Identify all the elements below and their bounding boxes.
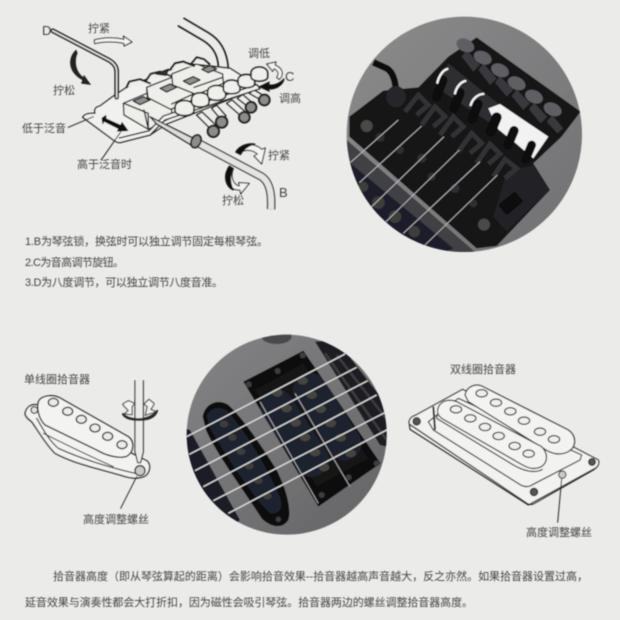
comb chrome part — [488, 104, 548, 158]
label: C: C — [285, 69, 294, 84]
saddles — [405, 95, 517, 178]
pickup body — [38, 396, 133, 457]
icon: double-headed arrow on plate — [102, 115, 128, 131]
height screw — [559, 471, 566, 478]
notes: bridge explanation list — [25, 234, 268, 289]
icon: upper allen key — [178, 18, 228, 68]
bridge body — [349, 37, 581, 248]
label: lower: 调低 — [248, 47, 270, 60]
photo background — [186, 334, 388, 536]
icon: fine tuner screw stems — [197, 90, 264, 128]
icon: fine tuner screw heads — [208, 95, 270, 137]
comb slots — [437, 80, 532, 159]
strings — [351, 120, 497, 245]
note 2: 2.C为音高调节旋钮。 — [25, 255, 124, 269]
line 1: 拾音器高度（即从琴弦算起的距离）会影响拾音效果--拾音器越高声音越大，反之亦然。如果拾音器设置过高， — [53, 569, 588, 583]
coil front — [437, 400, 546, 469]
coil front shadow — [437, 414, 543, 471]
icon: saddle blocks — [123, 57, 223, 129]
frame light edge — [260, 393, 350, 503]
arrow: loosen on key B — [225, 166, 249, 194]
poles rear — [476, 390, 560, 443]
panel: locking tremolo line drawing — [53, 18, 284, 209]
fine tuner plate — [493, 165, 549, 232]
plate opening — [428, 398, 582, 487]
label: raise: 调高 — [279, 91, 301, 105]
photo: pickups close-up — [186, 334, 388, 536]
label: humbucker pickup: 双线圈拾音器 — [450, 362, 516, 376]
label: B: B — [279, 185, 288, 200]
label: single coil pickup: 单线圈拾音器 — [24, 372, 90, 386]
plate screws — [413, 418, 595, 496]
mounting screws — [361, 120, 490, 231]
rotation arrow — [123, 399, 157, 420]
label: loosen bottom: 拧松 — [222, 193, 244, 207]
label: height screw right: 高度调整螺丝 — [526, 525, 592, 539]
side height screw — [433, 407, 435, 430]
comb shiny dark part — [435, 64, 498, 123]
single coil recess — [203, 402, 289, 526]
label: tighten right: 拧紧 — [268, 148, 290, 162]
humbucker poles — [272, 377, 356, 471]
text block: pickup height explanation — [25, 569, 588, 609]
photo background — [346, 16, 583, 252]
leader line — [558, 479, 562, 523]
label: D: D — [42, 23, 51, 38]
pickup mounting plate — [25, 405, 150, 478]
side screw — [31, 407, 38, 413]
humbucker coil A — [260, 390, 329, 478]
icon: bridge base plate — [83, 63, 260, 143]
top knob shadow — [262, 334, 292, 344]
icon: allen key B — [150, 117, 271, 209]
note 1: 1.B为琴弦锁，换弦时可以独立调节固定每根琴弦。 — [25, 234, 268, 248]
tuner posts — [462, 50, 563, 133]
label: tighten top: 拧紧 — [88, 21, 110, 35]
label: below harmonic: 低于泛音 — [22, 121, 66, 135]
plate lower edge — [409, 424, 597, 505]
arrow: top tighten — [94, 36, 132, 46]
arrow: knob C adjust — [259, 62, 284, 91]
panel: humbucker pickup drawing — [409, 385, 599, 523]
strings — [187, 354, 387, 513]
left pickup — [186, 428, 240, 522]
pickup strip — [350, 164, 453, 252]
panel: single coil pickup drawing — [25, 381, 157, 508]
humbucker frame — [243, 351, 381, 507]
maker mark — [499, 192, 523, 214]
label: above harmonic: 高于泛音时 — [77, 157, 132, 171]
humbucker coil B — [292, 372, 362, 460]
coil rear — [465, 385, 575, 454]
single coil body — [207, 408, 281, 514]
frame bevel — [255, 363, 368, 487]
line 2: 延音效果与演奏性都会大打折扣，因为磁性会吸引琴弦。拾音器两边的螺丝调整拾音器高度。 — [25, 595, 473, 609]
allen key in bridge — [373, 62, 396, 95]
plate inner edge — [37, 418, 135, 473]
label: height screw left: 高度调整螺丝 — [83, 512, 149, 526]
note 3: 3.D为八度调节，可以独立调节八度音准。 — [25, 275, 223, 289]
pole screws — [358, 182, 420, 237]
photo: locking tremolo close-up — [346, 16, 583, 253]
comb highlights — [437, 69, 483, 105]
arrow: tighten on key B — [236, 144, 265, 164]
mounting plate — [409, 389, 599, 504]
bridge details — [325, 353, 390, 440]
height screw — [135, 466, 145, 476]
icon: leader lines — [68, 117, 121, 159]
icon: allen key D — [53, 31, 117, 97]
icon: front rail of base plate — [119, 85, 260, 143]
saddle screws — [375, 133, 477, 207]
icon: tuning knobs — [175, 67, 268, 116]
bridge strip — [315, 340, 393, 448]
tuner knobs — [454, 36, 564, 119]
poles front — [450, 406, 534, 457]
frame screws — [246, 352, 380, 522]
screwdriver — [135, 381, 143, 463]
single coil poles — [220, 421, 272, 499]
guitar edge strip below bridge — [346, 140, 474, 252]
arrow: loosen on key D — [70, 50, 91, 85]
label: loosen left: 拧松 — [53, 83, 75, 97]
pole pieces — [48, 398, 127, 449]
leader line — [121, 477, 137, 508]
key collar — [386, 86, 406, 107]
